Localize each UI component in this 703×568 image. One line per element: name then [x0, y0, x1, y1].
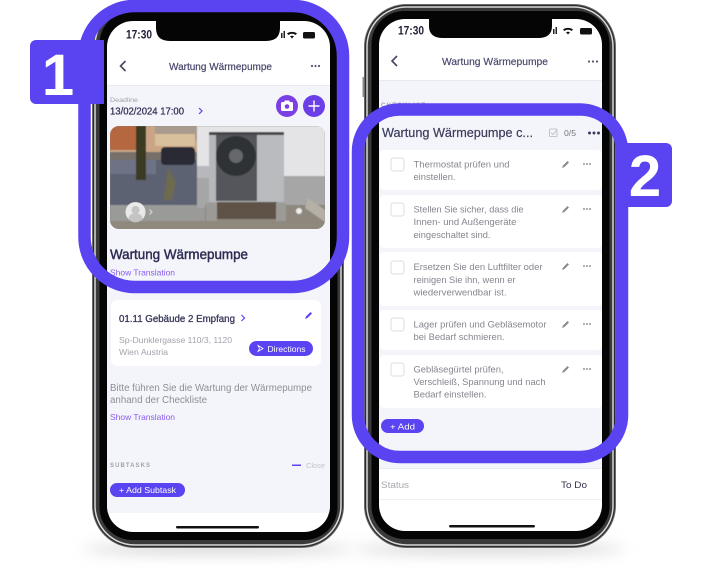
notch: [429, 19, 552, 38]
checklist item 4: bei Bedarf schmieren.: [414, 332, 504, 342]
phone 1 screen: anhand der Checkliste: [110, 395, 208, 406]
checklist item 5: Verschleiß, Spannung und nach: [414, 377, 546, 387]
status value: To Do: [561, 480, 587, 490]
phone 2 screen: [379, 19, 602, 531]
location chevron: [242, 315, 244, 321]
checklist counter: [549, 128, 576, 137]
phone 1 rim: [95, 6, 341, 545]
phone 2 rim: [367, 7, 613, 545]
checklist item 3: Ersetzen Sie den Luftfilter oder: [414, 262, 542, 272]
checklist item 5: Gebläsegürtel prüfen,: [414, 364, 504, 374]
location name: 01.11 Gebäude 2 Empfang: [119, 314, 235, 325]
add button: [381, 419, 424, 433]
status time: 17:30: [398, 26, 424, 38]
location card: Wien Austria: [119, 347, 168, 357]
phone 1 bezel: [100, 11, 338, 540]
photo: heat pump: [110, 126, 325, 229]
phone 1 body: [92, 4, 344, 548]
checklist item 2: eingeschaltet sind.: [414, 230, 490, 240]
avatar: [126, 202, 152, 222]
close toggle: Close: [306, 461, 325, 470]
badge 2: [622, 143, 672, 209]
location card: [111, 300, 321, 366]
subtasks label: SUBTASKS: [110, 463, 150, 469]
badge 1: 1: [42, 43, 74, 108]
phone 1 screen: [107, 21, 330, 532]
phone 2: [355, 4, 625, 553]
deadline chevron: [199, 108, 202, 114]
checklist item 5: Bedarf einstellen.: [414, 390, 486, 400]
badge 1: [30, 40, 104, 108]
checklist item 3: reinigen Sie ihn, wenn er: [414, 275, 516, 285]
checklist counter: 0/5: [564, 128, 576, 138]
deadline date: 13/02/2024 17:00: [110, 106, 184, 118]
add subtask button: + Add Subtask: [119, 485, 177, 495]
status time: 17:30: [126, 30, 152, 42]
phone 2 bezel: [372, 11, 610, 539]
checklist item 4: [380, 310, 602, 350]
task heading: Wartung Wärmepumpe: [110, 246, 248, 262]
checklist item 5: [380, 355, 602, 408]
checklist item 2: Stellen Sie sicher, dass die: [414, 204, 524, 214]
screen title: Wartung Wärmepumpe: [169, 61, 272, 73]
badge 2: 2: [629, 144, 661, 209]
add subtask button: [110, 483, 185, 497]
checklist title: Wartung Wärmepumpe c...: [382, 125, 533, 140]
home indicator: [176, 526, 259, 528]
checklist item 1: Thermostat prüfen und: [414, 160, 510, 170]
add button: + Add: [390, 422, 415, 432]
status icons: [281, 31, 315, 38]
icon: plus button: [303, 95, 325, 117]
checklist label: CHECKLIST: [381, 103, 425, 109]
address: Sp-Dunklergasse 110/3, 1120: [119, 335, 232, 345]
status label: Status: [381, 480, 409, 490]
description: Bitte führen Sie die Wartung der Wärmepumpe: [110, 383, 313, 394]
checklist item 3: [380, 252, 602, 306]
home indicator: [449, 525, 535, 528]
directions button: Directions: [268, 344, 306, 354]
checklist item 1: einstellen.: [414, 172, 456, 182]
highlight ring 1: [84, 6, 343, 287]
icon: edit pencil: [305, 312, 312, 319]
checklist item 1: [380, 150, 602, 190]
phone 2 body: [364, 4, 616, 548]
checklist item 2: Innen- und Außengeräte: [414, 217, 516, 227]
show translation link: Show Translation: [110, 412, 175, 422]
directions button: [249, 341, 313, 356]
status icons: [553, 27, 592, 34]
notch: [156, 21, 280, 41]
icon: camera button: [276, 95, 298, 117]
checklist item 2: [380, 195, 602, 248]
phone 2 side button: [362, 77, 364, 97]
deadline label: Deadline: [110, 97, 138, 104]
more dots: [311, 65, 320, 67]
phone 2 shadow: [355, 545, 625, 553]
highlight ring 2: [358, 110, 622, 457]
back chevron: [120, 61, 126, 71]
phone 1: [83, 4, 353, 553]
more dots: [588, 60, 598, 63]
phone 1 shadow: [83, 545, 353, 553]
back chevron: [392, 56, 397, 66]
checklist menu dots: [588, 132, 600, 134]
checklist item 3: wiederverwendbar ist.: [412, 288, 506, 298]
close toggle: [292, 462, 325, 468]
show translation link: Show Translation: [110, 268, 175, 278]
checklist item 4: Lager prüfen und Gebläsemotor: [414, 320, 546, 330]
screen title: Wartung Wärmepumpe: [442, 56, 548, 68]
